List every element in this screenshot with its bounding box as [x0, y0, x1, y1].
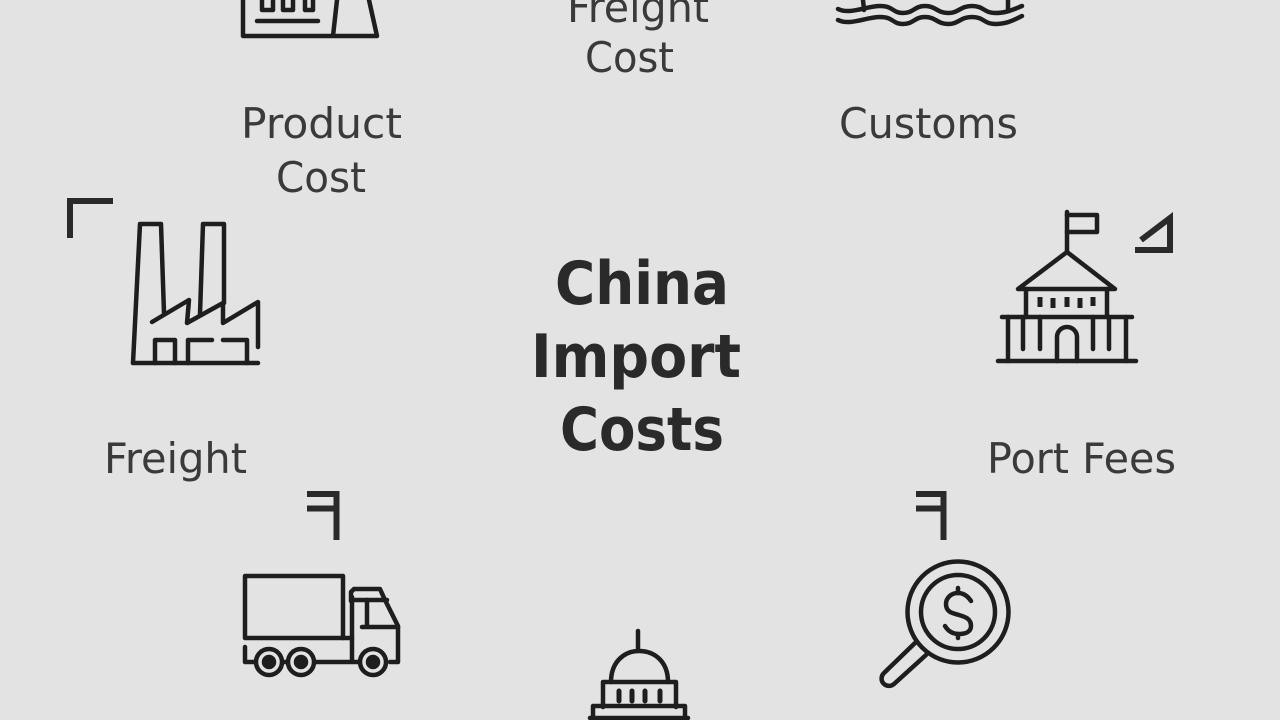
label: Freight Cost — [567, 0, 709, 82]
title: China — [555, 249, 729, 319]
label: Product Cost: Cost — [276, 153, 366, 202]
title: Import — [531, 322, 741, 392]
label: Port Fees: Port Fees — [987, 434, 1176, 483]
title — [531, 249, 741, 465]
corner mark: magnifier side — [916, 494, 944, 540]
label: Customs: Customs — [839, 99, 1018, 148]
corner mark: triangle — [1135, 218, 1170, 250]
icon: truck — [245, 576, 398, 675]
corner mark: truck side — [307, 494, 336, 540]
icon: factory — [133, 224, 258, 363]
icon: cropped product factory — [243, 0, 377, 36]
icon: capitol building — [590, 631, 688, 720]
label: Freight: Freight — [104, 434, 247, 483]
title: Costs — [560, 395, 724, 465]
corner mark: top left — [70, 201, 113, 238]
label: Product Cost: Product — [241, 99, 402, 148]
icon: customs ship waves — [838, 0, 1022, 24]
icon: magnifier with dollar sign — [882, 562, 1008, 686]
label: Freight Cost: Cost — [585, 33, 674, 82]
icon: port building — [998, 212, 1136, 361]
label: Product Cost — [241, 99, 402, 202]
